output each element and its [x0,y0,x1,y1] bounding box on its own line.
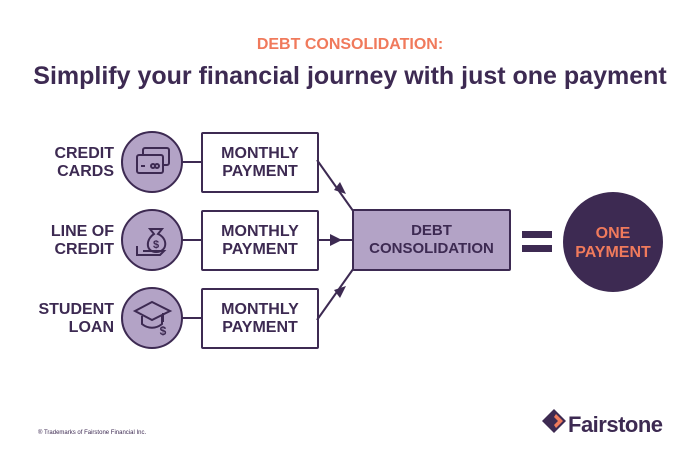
one payment text: PAYMENT [575,244,651,261]
text: MONTHLY [221,300,299,318]
label: student loan [38,301,114,336]
label: line of credit: CREDIT [54,241,114,258]
icon: money bag [122,210,182,270]
text: MONTHLY [221,222,299,240]
monthly payment boxes: PAYMENT [222,162,298,180]
label: credit cards: CREDIT [54,145,114,162]
footnote: ® Trademarks of Fairstone Financial Inc. [38,430,146,436]
label: line of credit [51,223,114,258]
equals sign [522,231,552,252]
label: student loan: LOAN [69,319,114,336]
monthly payment boxes [201,132,319,193]
icon: money bag: $ [153,239,159,251]
debt consolidation box: DEBT [411,222,452,239]
headline: Simplify your financial journey with just one payment [33,62,667,90]
one payment text: ONE [596,225,630,242]
icon: credit cards [122,132,182,192]
title: DEBT CONSOLIDATION: [257,36,443,53]
text: PAYMENT [222,240,298,258]
label: line of credit: LINE OF [51,223,114,240]
one payment circle [563,192,663,292]
label: credit cards: CARDS [57,163,114,180]
one payment text [575,225,651,261]
text: PAYMENT [222,318,298,336]
arrowheads [330,182,346,298]
monthly payment boxes: MONTHLY [221,144,299,162]
label: credit cards [54,145,114,180]
icon: graduation cap [122,288,182,348]
label: student loan: STUDENT [38,301,114,318]
icon: graduation cap: $ [160,324,167,338]
logo: Fairstone [568,412,663,437]
debt consolidation box [352,209,511,271]
debt consolidation box: CONSOLIDATION [369,240,494,257]
